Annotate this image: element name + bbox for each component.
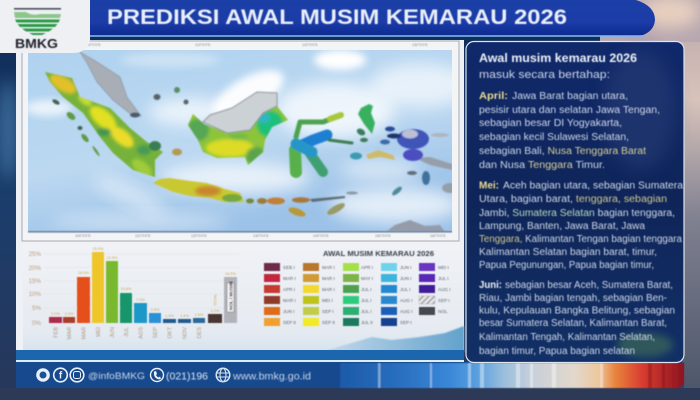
legend column 3: JUL I [361, 309, 372, 314]
legend column 2: MAR I [322, 276, 335, 281]
footer website: www.bmkg.go.id [232, 370, 311, 382]
Borneo north, Malaysia [203, 92, 277, 133]
islands [40, 52, 458, 232]
Juni paragraph: Juni: [479, 279, 502, 291]
Maluku [350, 104, 395, 160]
map ticks: 150°0'0"E [375, 234, 391, 238]
Sulawesi [295, 115, 352, 172]
right text panel [466, 42, 684, 362]
y axis labels: 5% [32, 305, 41, 312]
Nusa Tenggara [246, 196, 346, 218]
panel heading: masuk secara bertahap: [479, 69, 610, 81]
logo emblem [14, 8, 61, 35]
month labels: JUN [110, 327, 116, 338]
Java [153, 178, 244, 202]
Sumatra [44, 71, 164, 178]
Mei paragraph: Kalimantan Selatan bagian barat, timur, [479, 247, 657, 258]
value labels: 25.5% [93, 247, 104, 251]
April paragraph: Jawa Barat bagian utara, [512, 91, 628, 102]
month labels: MAR [67, 327, 73, 339]
value labels: 22.5% [107, 256, 118, 260]
legend column 1: APR I [283, 287, 295, 292]
legend column 5: MEI I [438, 265, 449, 270]
month labels: JUL [124, 327, 130, 337]
legend [264, 251, 451, 326]
Papua [346, 126, 458, 197]
y axis labels: 25% [29, 251, 41, 258]
April paragraph: sebagian besar DI Yogyakarta, [479, 118, 622, 129]
Mei paragraph: Papua Pegunungan, Papua bagian timur, [479, 260, 654, 271]
Juni paragraph: besar Sumatera Selatan, Kalimantan Barat, [479, 318, 667, 329]
legend column 4 [381, 263, 413, 326]
legend column 3: JUL I [361, 287, 372, 292]
title banner [80, 0, 655, 37]
value labels: 1.9% [195, 313, 204, 317]
month labels: MAR [82, 327, 88, 339]
Mei paragraph: Tenggara, Kalimantan Tengan bagian tenggara [479, 234, 682, 245]
legend column 2: MAR I [322, 265, 335, 270]
April paragraph: pesisir utara dan selatan Jawa Tengan, [479, 105, 660, 116]
value labels: 3.5% [151, 308, 160, 312]
bars [49, 252, 237, 323]
y axis labels [29, 251, 41, 327]
month labels: DES [197, 327, 203, 339]
value labels: 1.4% [165, 314, 174, 318]
map ticks: 130°0'0"E [412, 43, 428, 47]
legend column 5: AUG I [438, 287, 451, 292]
legend column 2: SEP I [322, 309, 334, 314]
legend column 4: JUL I [400, 287, 411, 292]
Mei paragraph [479, 180, 683, 271]
Juni paragraph: Kalimantan Tengah, Kalimantan Selatan, [479, 332, 655, 343]
legend column 1: JUN I [283, 309, 294, 314]
footer bar [16, 362, 684, 388]
legend column 3 [343, 263, 373, 326]
legend column 3: JUL II [361, 320, 373, 325]
legend column 2: SEP II [322, 320, 335, 325]
y axis labels: 10% [29, 291, 41, 298]
map ticks [28, 43, 452, 238]
legend column 4: AUG I [400, 298, 413, 303]
legend column 5 [419, 263, 451, 315]
Sumatra offshore islands [52, 87, 188, 157]
lower panel: cloudy backdrop and mountains [16, 242, 464, 362]
Mei paragraph: Aceh bagian utara, sebagian Sumatera [503, 180, 683, 192]
footer phone number: (021)196 [166, 370, 208, 382]
Juni paragraph: kulu, Kepulauan Bangka Belitung, sebagian [479, 306, 675, 316]
value labels: 7.0% [136, 298, 145, 302]
April paragraph: sebagian Bali, Nusa Tenggara Barat [479, 146, 646, 157]
legend column 5: NOL [438, 309, 448, 314]
month labels: NOV [182, 327, 188, 339]
social icons [36, 368, 84, 382]
legend column 4: SEP I [400, 320, 412, 325]
legend column 4: AUG I [400, 309, 413, 314]
legend column 3: MAY I [361, 276, 373, 281]
legend column 5: JUL I [438, 276, 449, 281]
white content panel [16, 40, 464, 362]
footer handle: @infoBMKG [88, 371, 145, 382]
Kalimantan [187, 106, 289, 166]
map ticks: 100°0'0"E [85, 43, 101, 47]
legend column 1: SEB I [283, 265, 295, 270]
value labels: 16.5% [225, 272, 236, 276]
map ticks: 120°0'0"E [302, 43, 318, 47]
panel heading [479, 53, 637, 81]
Mei paragraph: Jambi, Sumatera Selatan bagian tenggara, [479, 208, 675, 219]
map [24, 50, 470, 232]
Australia [387, 220, 445, 232]
legend column 4: JUN I [400, 276, 411, 281]
legend column 2 [303, 263, 335, 326]
April paragraph: dan Nusa Tenggara Timur. [479, 160, 605, 171]
value labels: 2.0% [65, 312, 74, 316]
Mei paragraph: Mei: [479, 180, 499, 192]
legend column 2: MEI I [322, 298, 333, 303]
social icons: f [59, 370, 63, 382]
legend column 4: JUN I [400, 265, 411, 270]
month labels: FEB [54, 327, 60, 338]
month labels: SEP [153, 327, 159, 338]
legend column 1 [264, 263, 296, 326]
legend title: AWAL MUSIM KEMARAU 2026 [323, 251, 434, 258]
map ticks: 110°0'0"E [195, 43, 211, 47]
value labels [51, 247, 236, 318]
April paragraph: sebagian kecil Sulawesi Selatan, [479, 132, 629, 143]
value labels: 1.4% [180, 314, 189, 318]
bar chart [29, 247, 240, 339]
value labels: 10.8% [121, 287, 132, 291]
y axis labels: 20% [29, 265, 41, 272]
sum label on dark bar: TOTAL [212, 293, 218, 306]
legend column 2: MAR I [322, 287, 335, 292]
map frame [22, 41, 459, 241]
climate stripes [340, 363, 684, 388]
Juni paragraph: sebagian besar Aceh, Sumatera Barat, [505, 280, 673, 291]
BMKG logo badge [0, 0, 90, 53]
month labels: AGS [138, 327, 144, 339]
map ticks: 130°0'0"E [253, 234, 269, 238]
legend column 1: MAR I [283, 276, 296, 281]
Juni paragraph: bagian timur, Papua bagian selatan [479, 346, 635, 357]
legend column 5: SEP I [438, 298, 450, 303]
value labels: 2.0% [51, 312, 60, 316]
label in grey bar: NOL / MUSIM [228, 281, 234, 310]
legend column 3: JUL I [361, 298, 372, 303]
month labels [54, 326, 203, 339]
y axis labels: 0% [32, 320, 41, 327]
Mei paragraph: Lampung, Banten, Jawa Barat, Jawa [479, 221, 645, 232]
Juni paragraph [479, 279, 675, 357]
map ticks: 160°0'0"E [430, 234, 446, 238]
month labels: MEI [96, 327, 102, 337]
month labels: OKT [168, 326, 174, 338]
title text: PREDIKSI AWAL MUSIM KEMARAU 2026 [107, 6, 567, 29]
Juni paragraph: Riau, Jambi bagian tengah, sebagian Ben- [479, 293, 667, 304]
value labels: 16.5% [78, 271, 89, 275]
label in grey bar [227, 281, 234, 312]
Mei paragraph: Utara, bagian barat, tenggara, sebagian [479, 194, 667, 205]
April paragraph: April: [479, 90, 508, 102]
legend column 1: MAR I [283, 298, 296, 303]
map ticks: 100°0'0"E [75, 234, 91, 238]
map ticks: 110°0'0"E [135, 234, 151, 238]
April paragraph [479, 90, 660, 171]
clouds [24, 50, 470, 230]
panel heading: Awal musim kemarau 2026 [479, 53, 637, 65]
icon: globe [216, 368, 230, 382]
map ticks: 120°0'0"E [191, 234, 207, 238]
legend column 1: SEP II [283, 320, 296, 325]
map ticks: 140°0'0"E [313, 234, 329, 238]
y axis labels: 15% [29, 278, 41, 285]
legend column 3: APR I [361, 265, 373, 270]
value labels: 3.2% [211, 309, 220, 313]
logo text: BMKG [15, 36, 58, 51]
icon: phone [150, 368, 164, 382]
Malay peninsula [80, 52, 141, 116]
